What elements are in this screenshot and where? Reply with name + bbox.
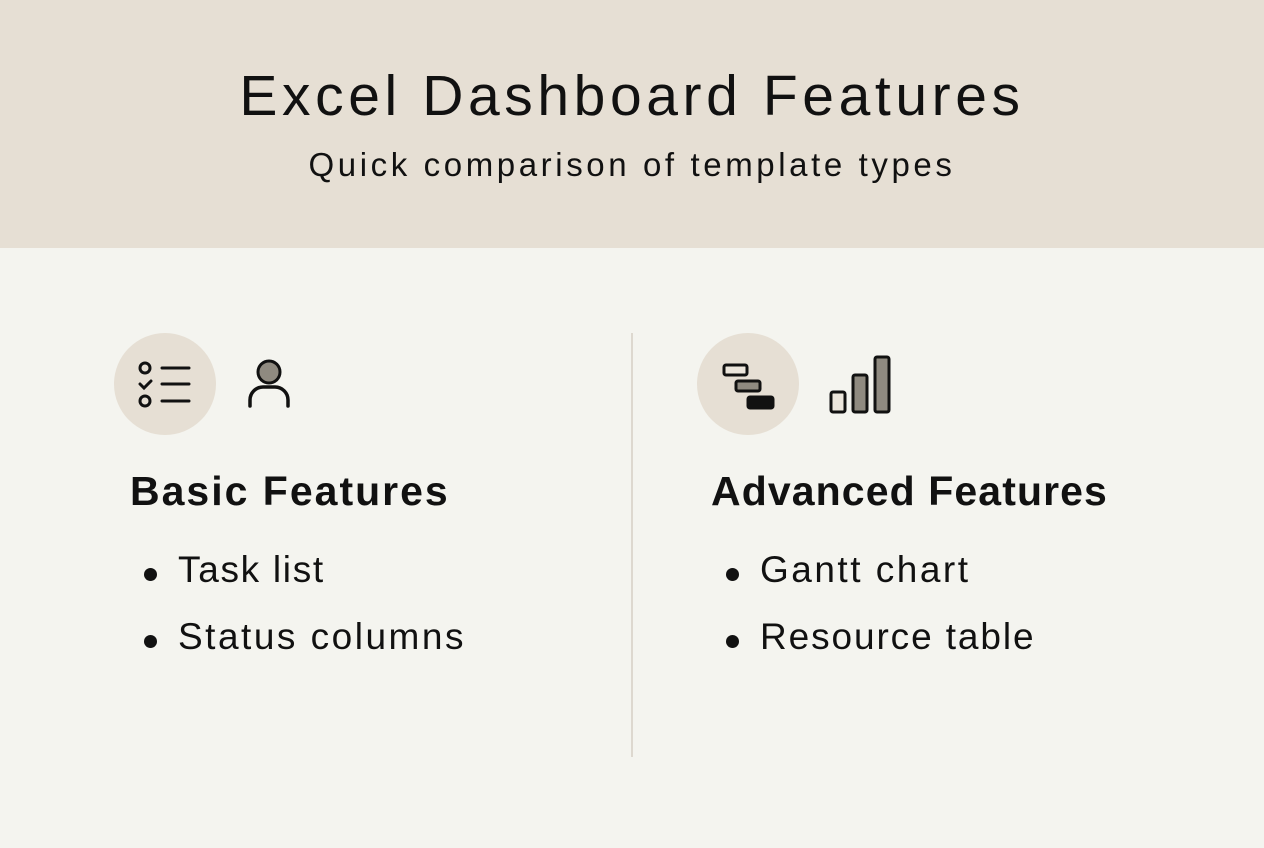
panel: basic features (114, 333, 466, 657)
bullet list: Status columns (178, 616, 466, 657)
icon: gantt (697, 333, 799, 435)
heading: Basic Features (130, 468, 450, 514)
subtitle: Quick comparison of template types (309, 146, 955, 183)
bullet list: Resource table (760, 616, 1035, 657)
heading: Advanced Features (711, 468, 1108, 514)
divider (631, 333, 633, 757)
bullet list: Task list (178, 549, 325, 590)
icon: bar chart (830, 356, 890, 414)
icon: person (248, 360, 290, 408)
bullet list (144, 549, 466, 657)
bullet list: Gantt chart (760, 549, 971, 590)
bullet list (726, 549, 1035, 657)
header band (0, 0, 1264, 248)
icon: checklist (114, 333, 216, 435)
panel: advanced features (697, 333, 1108, 657)
title: Excel Dashboard Features (239, 64, 1025, 128)
